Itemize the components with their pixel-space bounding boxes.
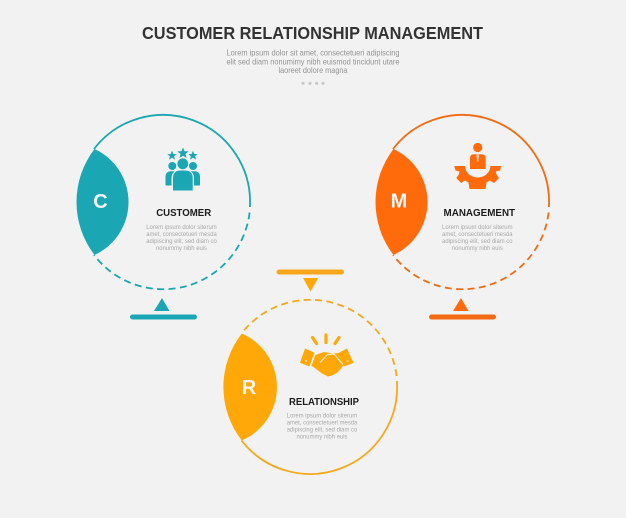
customer body text: adipiscing elit, sed diam co: [146, 238, 217, 245]
relationship pointer triangle: [303, 278, 318, 292]
decorative dots: [301, 82, 325, 85]
management lens badge: [375, 149, 428, 255]
management pointer triangle: [453, 298, 468, 311]
icon: person on gear: [454, 143, 501, 189]
customer pointer triangle: [154, 298, 170, 311]
management body text: nonummy nibh euis: [452, 245, 503, 252]
relationship body text: nonummy nibh euis: [296, 434, 348, 440]
relationship circle outline: [242, 300, 397, 474]
relationship body text: Lorem ipsum dolor siterum: [287, 412, 358, 420]
subtitle text: elit sed diam nonumimy nibh euismod tincidunt utare: [226, 57, 400, 66]
customer body text: nonummy nibh euis: [156, 245, 208, 252]
subtitle text: laoreet dolore magna: [278, 66, 348, 75]
relationship letter: R: [242, 377, 257, 399]
panel: management: [375, 115, 549, 320]
management body text: [442, 224, 513, 252]
management base bar: [429, 314, 496, 320]
subtitle text: [226, 48, 400, 75]
management letter: M: [391, 190, 407, 212]
relationship body text: [287, 412, 358, 440]
relationship lens badge: [223, 334, 277, 440]
customer heading: CUSTOMER: [156, 208, 212, 219]
customer body text: [146, 224, 217, 252]
panel: relationship: [223, 270, 397, 474]
title: CUSTOMER RELATIONSHIP MANAGEMENT: [142, 23, 483, 43]
customer letter: C: [93, 191, 108, 213]
customer body text: Lorem ipsum dolor siterum: [146, 224, 217, 231]
panel: customer: [76, 115, 250, 319]
management body text: amet, consectetueri mesda: [442, 231, 513, 238]
relationship top bar: [276, 270, 344, 274]
customer lens badge: [76, 149, 129, 255]
icon: customers with stars: [166, 148, 200, 190]
relationship heading: RELATIONSHIP: [289, 397, 359, 408]
management circle outline: [393, 115, 549, 289]
customer body text: amet, consectetueri mesda: [146, 231, 217, 238]
relationship body text: amet, consectetueri mesda: [287, 420, 358, 426]
management heading: MANAGEMENT: [444, 208, 515, 219]
subtitle text: Lorem ipsum dolor sit amet, consectetueri adipiscing: [226, 48, 400, 58]
customer base bar: [130, 314, 197, 320]
management body text: Lorem ipsum dolor siterum: [442, 224, 513, 231]
management body text: adipiscing elit, sed diam co: [442, 238, 513, 245]
icon: handshake: [300, 335, 354, 376]
customer circle outline: [94, 115, 250, 289]
relationship body text: adipiscing elit, sed diam co: [287, 426, 358, 434]
